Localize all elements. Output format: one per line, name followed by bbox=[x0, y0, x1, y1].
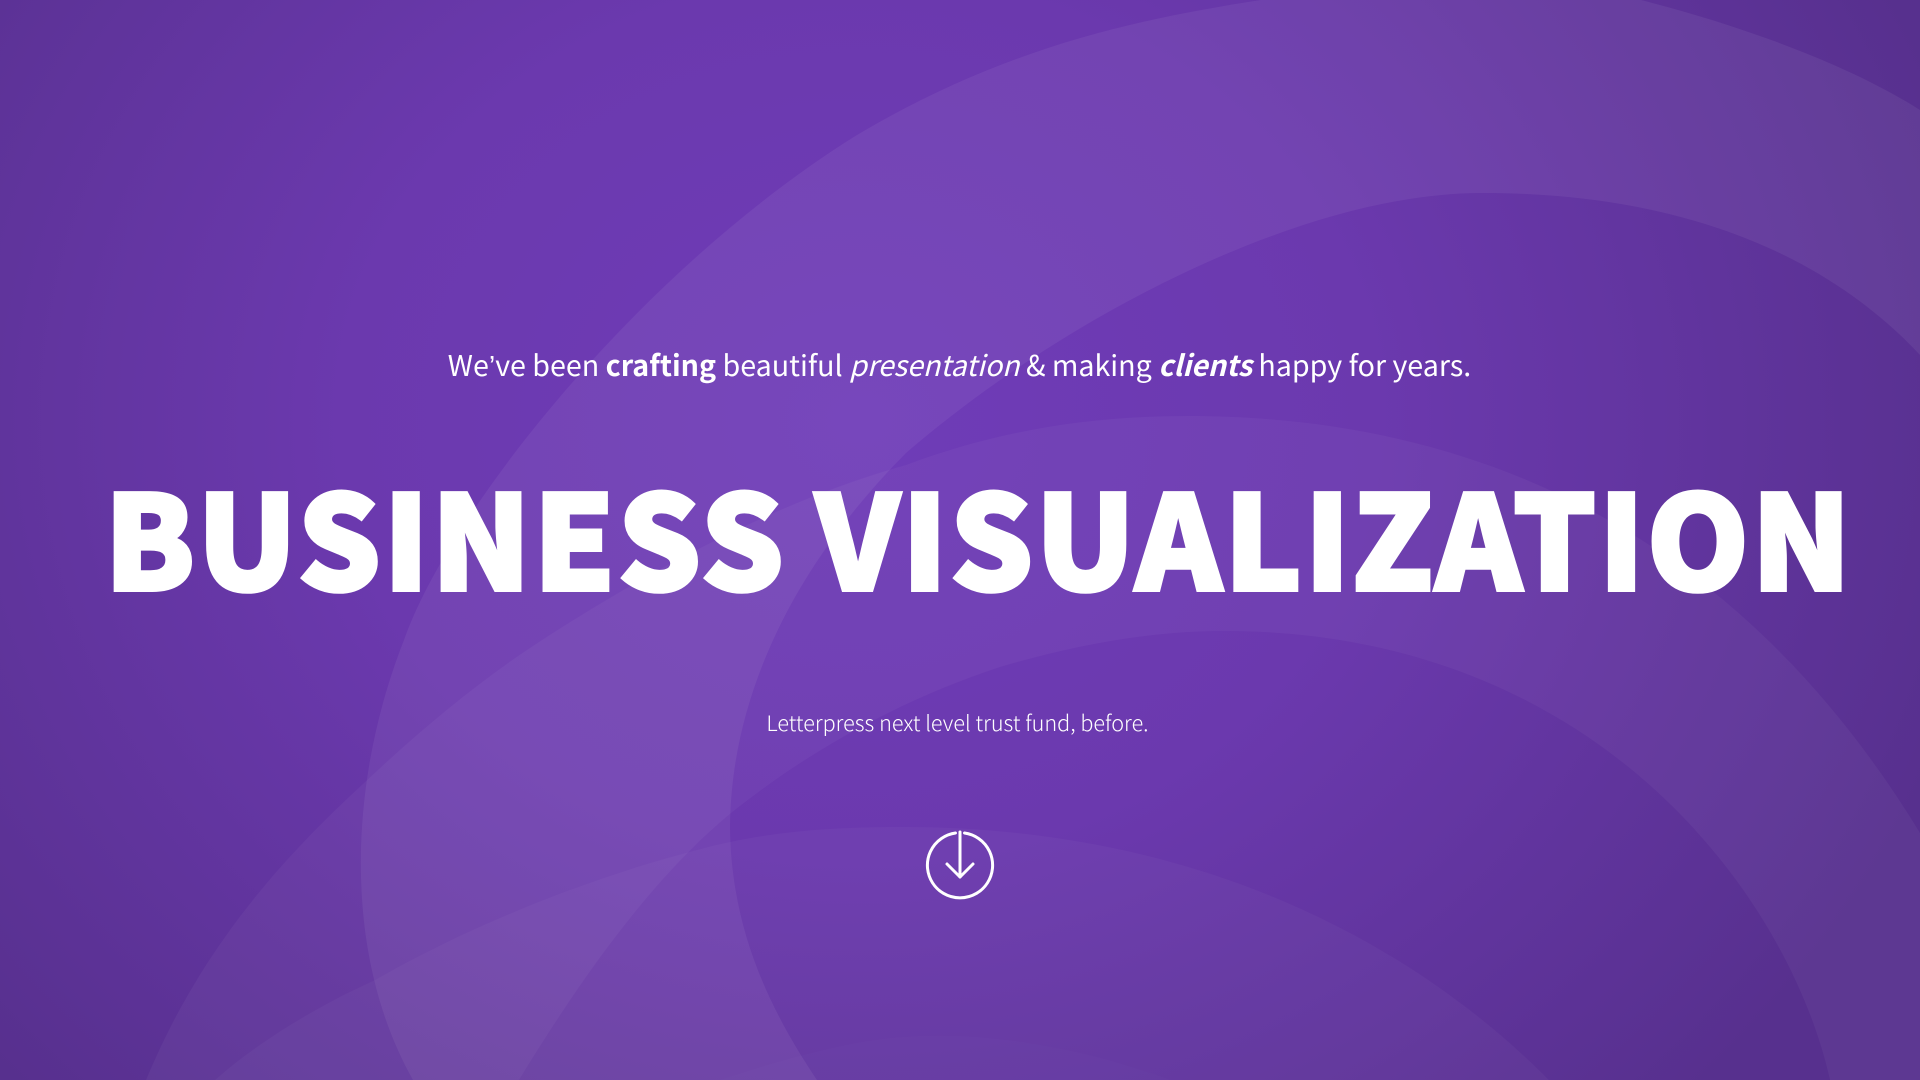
subtitle: Letterpress next level trust fund, before. bbox=[766, 707, 1149, 738]
title: BUSINESS VISUALIZATION bbox=[104, 440, 1854, 628]
tagline: We’ve been crafting beautiful presentation & making clients happy for years. bbox=[448, 344, 1471, 385]
icon: down arrow in circle bbox=[926, 830, 994, 900]
